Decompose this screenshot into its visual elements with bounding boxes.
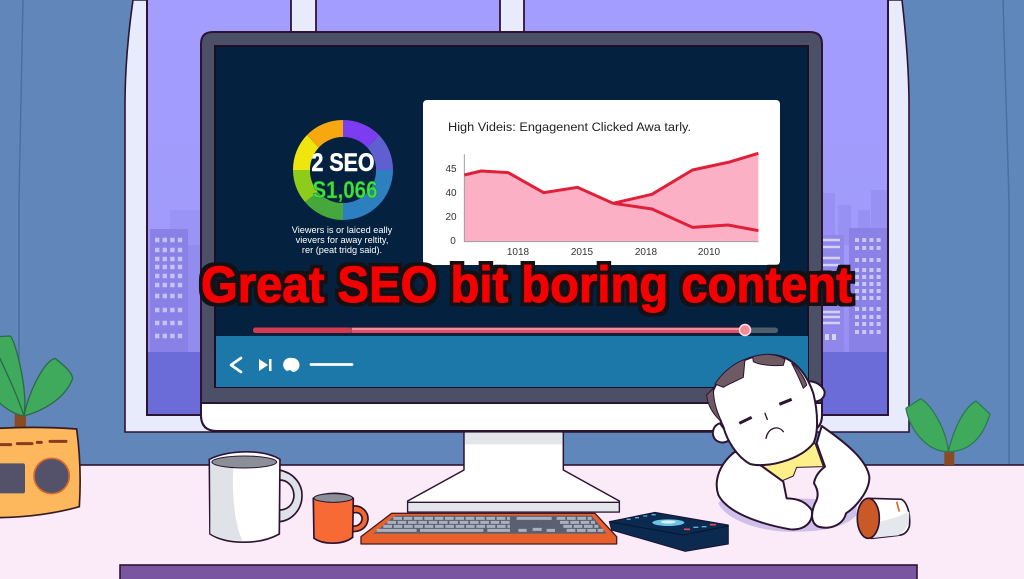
chart axis labels: 40: [445, 188, 457, 199]
hair: [707, 354, 807, 422]
chart axis labels: 20: [445, 212, 457, 223]
monitor: [201, 32, 822, 431]
sleeping person: [707, 354, 869, 532]
progress bar: [253, 324, 778, 336]
headline: Great SEO bit boring content: [201, 256, 852, 313]
donut chart badge: [293, 120, 393, 220]
icon: share: [231, 358, 241, 372]
icon: white coffee mug: [209, 452, 302, 542]
screen: [215, 46, 808, 387]
chart card: [423, 100, 780, 265]
city skyline: right: [822, 190, 887, 352]
chart axis labels: 0: [450, 236, 456, 247]
donut caption: Viewers is or laiced eally: [292, 225, 393, 235]
chart title: High Videis: Engagenent Clicked Awa tarly.: [448, 120, 691, 134]
icon: radio: [0, 427, 80, 518]
face: [739, 399, 792, 423]
shadow: [718, 497, 857, 532]
fallen cup: [857, 498, 910, 538]
player control bar: [216, 336, 808, 387]
monitor stand: [408, 432, 619, 512]
city skyline: left: [150, 210, 202, 352]
icon: small orange mug: [313, 493, 368, 543]
donut chart badge: 2 SEO: [312, 149, 374, 177]
window ground band: [148, 352, 887, 414]
chart axis labels: 2010: [698, 247, 721, 258]
chart axis labels: 2018: [635, 247, 658, 258]
chart axis labels: 2015: [571, 247, 594, 258]
icon: next: [259, 359, 272, 371]
keyboard: [361, 513, 617, 544]
icon: comment bubble: [283, 358, 300, 372]
volume line: [311, 363, 352, 366]
donut caption: vievers for away reltity,: [296, 235, 388, 245]
plant: [0, 336, 73, 430]
collar: [762, 443, 823, 482]
chart axis labels: 45: [445, 164, 457, 175]
area line chart: [464, 153, 758, 242]
window frame: [125, 0, 909, 432]
donut chart badge: S1,066: [312, 177, 378, 204]
remote control: [609, 512, 728, 551]
arm: left: [717, 452, 812, 529]
right plant: [906, 399, 990, 465]
head: [713, 355, 817, 465]
left plant and radio: [0, 336, 80, 518]
desk: [0, 465, 1024, 579]
donut caption: rer (peat tridg said).: [302, 245, 382, 255]
ear: right: [805, 381, 825, 402]
donut caption: [292, 225, 393, 255]
ear: left: [713, 423, 731, 442]
arm: right: [812, 426, 869, 528]
chart axis labels: [445, 164, 721, 258]
chart axis labels: 1018: [507, 247, 530, 258]
